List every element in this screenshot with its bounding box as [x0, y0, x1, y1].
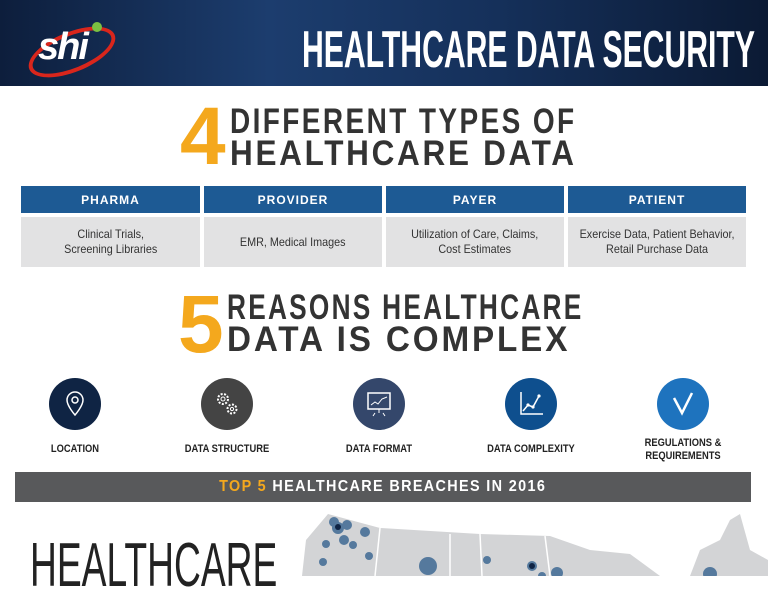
map of US: [302, 514, 768, 576]
logo: shi: [38, 26, 87, 68]
title: 5 reasons: REASONS HEALTHCARE: [227, 288, 583, 327]
banner title: HEALTHCARE DATA SECURITY: [302, 21, 755, 79]
icon: check: [657, 378, 709, 430]
section bar: top 5 breaches: TOP 5 HEALTHCARE BREACHES IN 2016: [219, 478, 547, 495]
icon labels: DATA STRUCTURE: [185, 443, 269, 455]
logo: [28, 22, 116, 78]
table of data types: EMR, Medical Images: [240, 234, 346, 248]
table of data types: Exercise Data, Patient Behavior,: [580, 227, 734, 241]
table of data types: Utilization of Care, Claims,: [411, 227, 539, 241]
icon labels: LOCATION: [51, 443, 99, 455]
table of data types: Retail Purchase Data: [606, 242, 708, 256]
header banner: [0, 0, 768, 86]
icon: data complexity: [505, 378, 557, 430]
big heading: healthcare: HEALTHCARE: [30, 531, 277, 600]
icon labels: DATA FORMAT: [346, 443, 412, 455]
table of data types: [21, 186, 746, 267]
icon labels: REQUIREMENTS: [645, 450, 721, 462]
icon: location: [49, 378, 101, 430]
title: 4 types: DIFFERENT TYPES OF: [230, 102, 577, 141]
title: 4 types: 4: [180, 91, 226, 182]
icon labels: REGULATIONS &: [645, 437, 721, 449]
title: 5 reasons: 5: [178, 279, 224, 370]
icon: data format: [353, 378, 405, 430]
title: 5 reasons: DATA IS COMPLEX: [227, 320, 570, 359]
table of data types: Clinical Trials,: [77, 227, 144, 241]
section bar: top 5 breaches: [15, 472, 751, 502]
icon labels: [51, 437, 722, 462]
title: 4 types: HEALTHCARE DATA: [230, 134, 577, 173]
table of data types: Cost Estimates: [439, 242, 511, 256]
icon labels: DATA COMPLEXITY: [487, 443, 575, 455]
title: 4 types: [180, 91, 577, 182]
table of data types: PAYER: [453, 192, 497, 206]
icon: gears: [201, 378, 253, 430]
table of data types: PHARMA: [81, 192, 140, 206]
table of data types: PATIENT: [629, 192, 685, 206]
table of data types: Screening Libraries: [64, 242, 157, 256]
table of data types: PROVIDER: [258, 192, 328, 206]
title: 5 reasons: [178, 279, 583, 370]
